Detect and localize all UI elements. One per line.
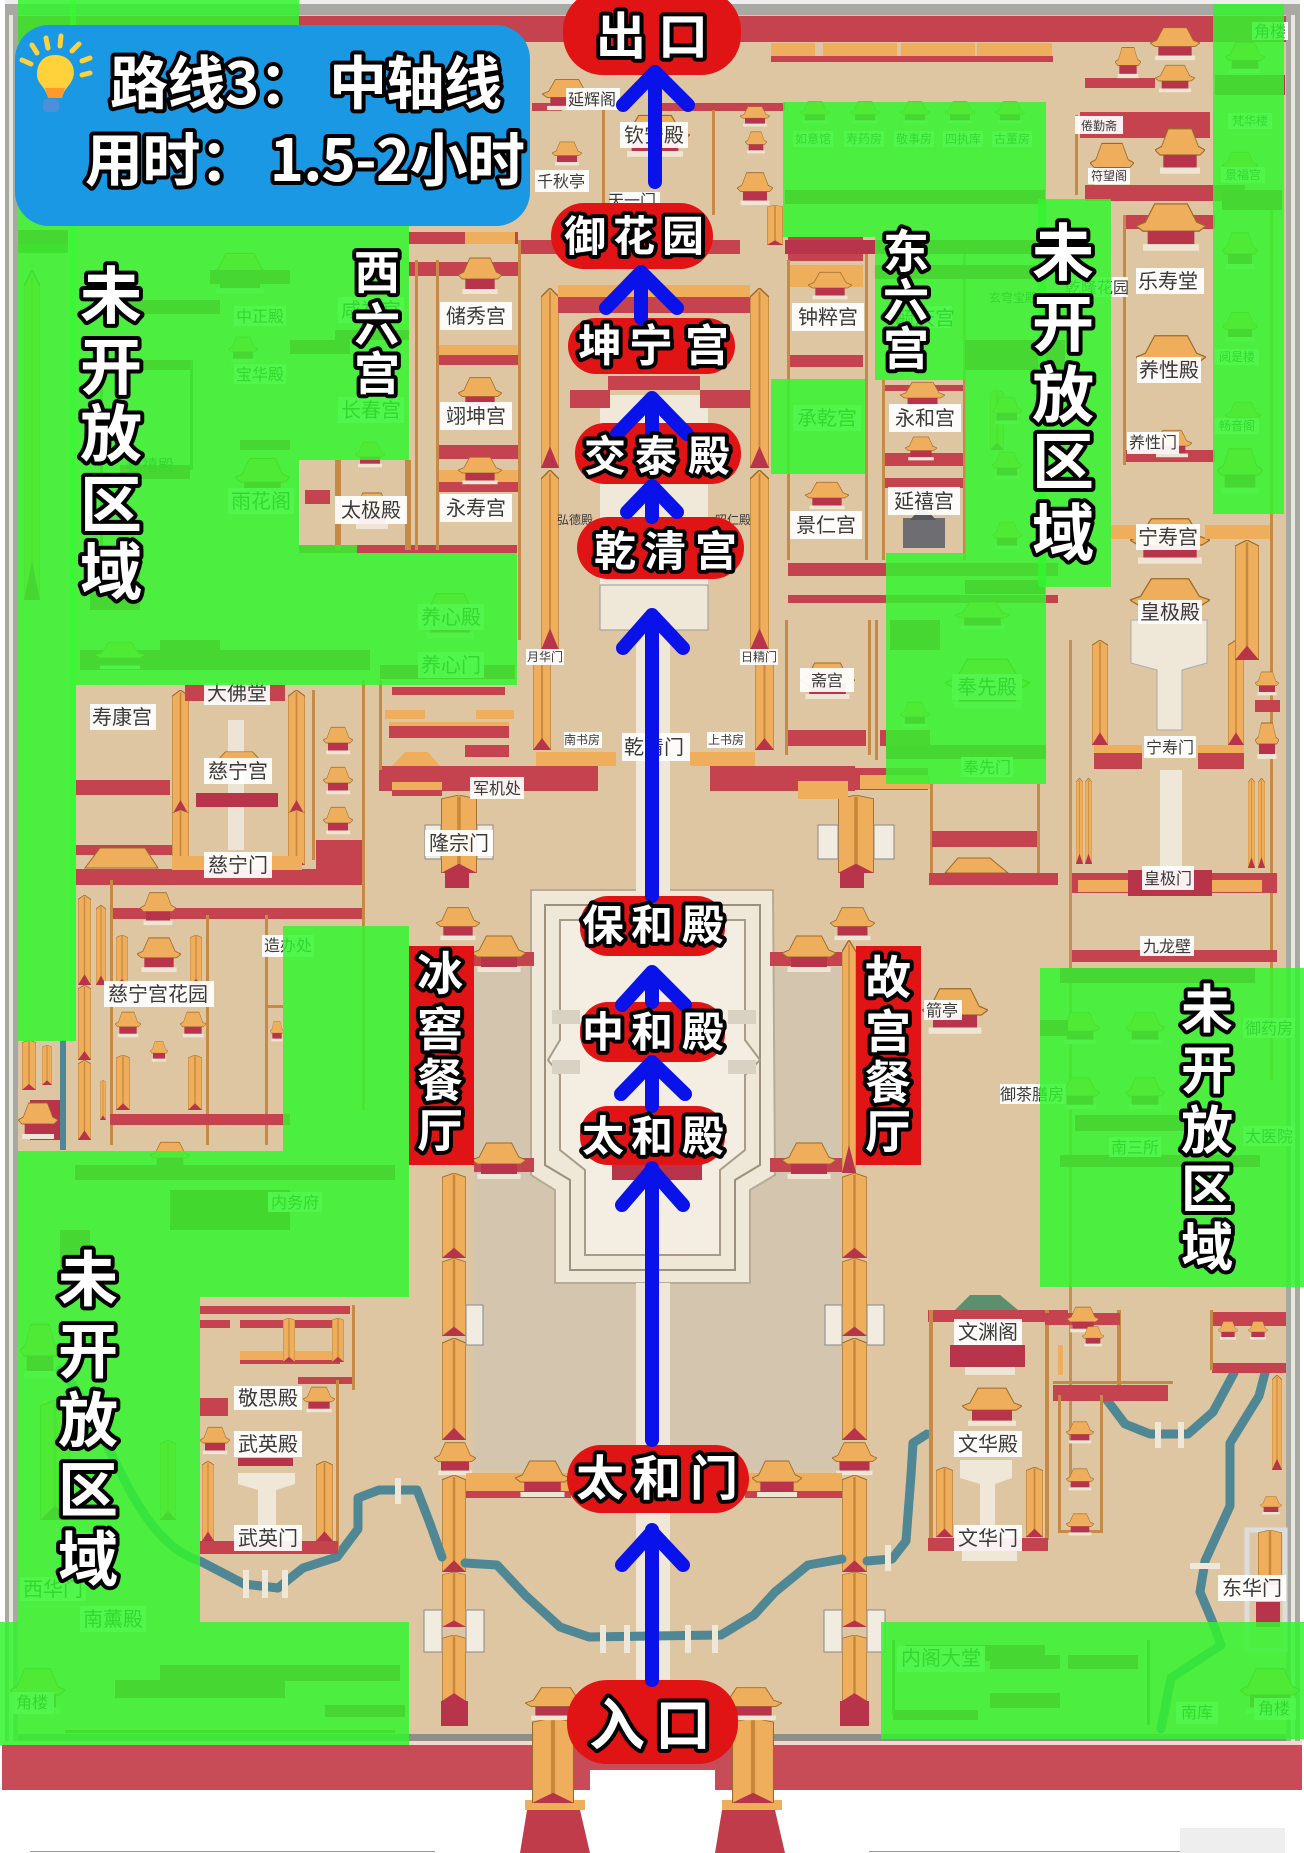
label: 景仁宫: 景仁宫 xyxy=(796,509,856,538)
label: 天一门: 天一门 xyxy=(608,187,656,211)
arrow: 中和殿 to 保和殿 xyxy=(622,972,685,1005)
closed areas: south-east xyxy=(881,968,1304,1739)
stop: 太和殿: 太和殿 xyxy=(582,1103,724,1164)
label: 角楼: 角楼 xyxy=(1254,18,1286,42)
rivers xyxy=(60,1370,1265,1729)
label: 奉先殿: 奉先殿 xyxy=(957,671,1017,700)
stop: 御花园: 御花园 xyxy=(564,203,704,264)
closed areas: north-east xyxy=(771,4,1284,784)
arrow: 太和门 to 太和殿 xyxy=(622,1168,683,1440)
label: 翊坤宫: 翊坤宫 xyxy=(446,400,506,429)
label: 养性门: 养性门 xyxy=(1129,429,1177,453)
label: 太医院: 太医院 xyxy=(1245,1123,1293,1147)
cining palace xyxy=(18,680,514,1150)
label: 永和宫: 永和宫 xyxy=(895,402,955,431)
label: 内阁大堂: 内阁大堂 xyxy=(901,1642,981,1671)
label: 隆宗门: 隆宗门 xyxy=(429,827,489,856)
label: 南三所: 南三所 xyxy=(1111,1134,1159,1158)
gate towers xyxy=(520,1688,785,1853)
label: 玄穹宝殿: 玄穹宝殿 xyxy=(989,289,1037,306)
label: 景福宫: 景福宫 xyxy=(1225,166,1261,183)
label: 四执库: 四执库 xyxy=(945,130,981,147)
wenhua palace xyxy=(928,1295,1286,1650)
route stop names xyxy=(564,0,738,1762)
label: 箭亭 xyxy=(922,989,988,1034)
big label: 未开放区域 west: 未开放区域 xyxy=(80,246,142,612)
label: 角楼: 角楼 xyxy=(16,1689,48,1713)
label: 延禧宫: 延禧宫 xyxy=(894,485,954,514)
label: 寿药房: 寿药房 xyxy=(846,130,882,147)
label: 阅是楼: 阅是楼 xyxy=(1219,348,1255,365)
label: 寿康宫: 寿康宫 xyxy=(92,701,152,730)
label: 慈宁宫花园: 慈宁宫花园 xyxy=(108,978,208,1007)
arrow: entrance to 太和门 xyxy=(622,1530,683,1680)
label: 西华门: 西华门 xyxy=(23,1573,83,1602)
central corridors and gates xyxy=(424,795,894,1726)
label: 军机处: 军机处 xyxy=(473,775,521,799)
label: 上书房: 上书房 xyxy=(708,731,744,748)
label: 养心门: 养心门 xyxy=(421,649,481,678)
title line 1: 路线3： 中轴线 xyxy=(110,37,502,121)
restaurant sign: 冰窖餐厅: 冰窖餐厅 xyxy=(417,938,463,1161)
label: 武英殿: 武英殿 xyxy=(238,1428,298,1457)
label: 皇极殿: 皇极殿 xyxy=(1140,596,1200,625)
label: 斋宫: 斋宫 xyxy=(811,667,843,691)
label: 养心殿: 养心殿 xyxy=(421,601,481,630)
restaurant sign: 故宫餐厅: 故宫餐厅 xyxy=(865,942,911,1162)
arrow: 坤宁宫 to 御花园 xyxy=(606,272,677,318)
label: 南书房: 南书房 xyxy=(564,731,600,748)
label: 东华门: 东华门 xyxy=(1222,1572,1282,1601)
arrow: 乾清宫 to 交泰殿 xyxy=(627,486,677,517)
label: 咸福宫: 咸福宫 xyxy=(341,294,401,323)
label: 造办处: 造办处 xyxy=(264,932,312,956)
label: 箭亭: 箭亭 xyxy=(926,997,958,1021)
label: 如意馆: 如意馆 xyxy=(795,130,831,147)
stop: 中和殿: 中和殿 xyxy=(582,999,724,1060)
label: 武英门: 武英门 xyxy=(238,1522,298,1551)
label: 宝华殿: 宝华殿 xyxy=(236,361,284,385)
label: 毓庆宫: 毓庆宫 xyxy=(895,302,955,331)
label: 慈宁宫: 慈宁宫 xyxy=(208,755,268,784)
label: 文渊阁: 文渊阁 xyxy=(958,1316,1018,1345)
label: 春禧殿: 春禧殿 xyxy=(126,452,174,476)
label: 宁寿宫: 宁寿宫 xyxy=(1138,521,1198,550)
arrow: 保和殿 to 乾清宫 xyxy=(623,615,683,896)
label: 乐寿堂: 乐寿堂 xyxy=(1138,265,1198,294)
label: 延辉阁: 延辉阁 xyxy=(568,86,616,110)
label: 昭仁殿: 昭仁殿 xyxy=(715,511,751,528)
label: 内务府: 内务府 xyxy=(271,1189,319,1213)
label: 梵华楼: 梵华楼 xyxy=(1232,112,1268,129)
label: 慈宁门: 慈宁门 xyxy=(208,849,268,878)
label: 斋宫 xyxy=(800,667,854,692)
closed areas: north-west xyxy=(18,0,517,1041)
label: 日精门: 日精门 xyxy=(741,648,777,665)
label: 倦勤斋: 倦勤斋 xyxy=(1081,117,1117,134)
label: 敬思殿: 敬思殿 xyxy=(238,1382,298,1411)
restaurant sign: 冰窖餐厅 xyxy=(409,938,474,1165)
label: 九龙壁: 九龙壁 xyxy=(1143,933,1191,957)
label: 御茶膳房: 御茶膳房 xyxy=(1000,1081,1064,1105)
route arrows xyxy=(606,72,688,1680)
arrow: 交泰殿 to 坤宁宫 xyxy=(617,398,687,440)
central plaza and terrace xyxy=(474,620,842,1683)
label: 千秋亭: 千秋亭 xyxy=(537,168,585,192)
label: 文华殿: 文华殿 xyxy=(958,1428,1018,1457)
route title panel xyxy=(15,25,530,226)
label: 古董房: 古董房 xyxy=(994,130,1030,147)
icon: light bulb xyxy=(22,36,90,112)
stop: 保和殿: 保和殿 xyxy=(582,892,724,953)
label: 钟粹宫: 钟粹宫 xyxy=(798,301,858,330)
stop: 太和门: 太和门 xyxy=(576,1439,738,1509)
label: 南库: 南库 xyxy=(1181,1699,1213,1723)
title line 2: 用时： 1.5-2小时 xyxy=(85,114,525,198)
arrow: 太和殿 to 中和殿 xyxy=(621,1062,685,1106)
route stop pills xyxy=(551,0,749,1764)
stop: 乾清宫: 乾清宫 xyxy=(594,518,737,579)
label: 南薰殿: 南薰殿 xyxy=(83,1603,143,1632)
stop: 坤宁宫: 坤宁宫 xyxy=(578,310,729,374)
label: 弘德殿: 弘德殿 xyxy=(557,511,593,528)
label: 月华门: 月华门 xyxy=(527,648,563,665)
inner court xyxy=(379,43,1053,791)
label: 皇极门: 皇极门 xyxy=(1144,865,1192,889)
big label: 未开放区域 south-west: 未开放区域 xyxy=(58,1232,118,1599)
label: 符望阁: 符望阁 xyxy=(1091,167,1127,184)
east six palaces xyxy=(710,237,1058,799)
west six palaces xyxy=(299,232,521,640)
wuying palace xyxy=(200,1305,355,1554)
label: 奉先门: 奉先门 xyxy=(963,754,1011,778)
label: 承乾宫: 承乾宫 xyxy=(797,402,857,431)
closed areas: south-west xyxy=(0,926,409,1745)
ningshou palace east xyxy=(1069,28,1280,1480)
label: 养性殿: 养性殿 xyxy=(1139,354,1199,383)
big label: 西六宫: 西六宫 xyxy=(354,237,400,404)
label: 永寿宫: 永寿宫 xyxy=(446,492,506,521)
label: 宁寿门: 宁寿门 xyxy=(1146,734,1194,758)
label: 雨花阁: 雨花阁 xyxy=(231,485,291,514)
jiandong yard with red walls xyxy=(929,784,1058,885)
label: 角楼: 角楼 xyxy=(1258,1695,1290,1719)
label: 太极殿: 太极殿 xyxy=(341,494,401,523)
label: 长春宫: 长春宫 xyxy=(341,394,401,423)
big label: 东六宫: 东六宫 xyxy=(883,216,929,379)
arrow: 御花园 to exit xyxy=(623,72,688,182)
label: 敬事房: 敬事房 xyxy=(896,130,932,147)
label: 储秀宫: 储秀宫 xyxy=(446,300,506,329)
restaurant sign: 故宫餐厅 xyxy=(856,942,921,1165)
big label: 未开放区域 south-east: 未开放区域 xyxy=(1181,968,1233,1281)
label: 文华门: 文华门 xyxy=(958,1522,1018,1551)
label: 钦安殿: 钦安殿 xyxy=(624,119,684,148)
label: 乾清门: 乾清门 xyxy=(624,731,684,760)
stop: 交泰殿: 交泰殿 xyxy=(584,423,730,484)
label: 畅音阁: 畅音阁 xyxy=(1219,417,1255,434)
big label: 未开放区域 north-east: 未开放区域 xyxy=(1032,203,1094,573)
label: 御药房: 御药房 xyxy=(1245,1015,1293,1039)
label: 大佛堂: 大佛堂 xyxy=(207,677,267,706)
stop: 入口: 入口 xyxy=(589,1681,711,1762)
label: 乾隆花园: 乾隆花园 xyxy=(1065,274,1129,298)
label: 中正殿: 中正殿 xyxy=(236,303,284,327)
